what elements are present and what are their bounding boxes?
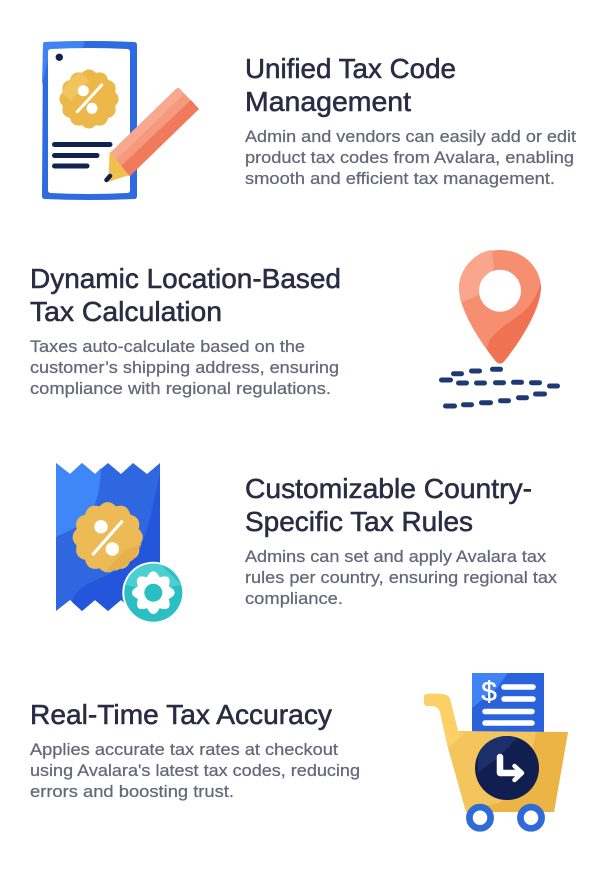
description: Admins can set and apply Avalara tax	[245, 547, 547, 566]
document hole	[56, 54, 63, 61]
description: compliance.	[245, 589, 343, 608]
text lines	[54, 144, 110, 166]
icon: shopping cart with invoice	[424, 673, 568, 828]
heading: Specific Tax Rules	[245, 506, 473, 537]
section 3 text	[245, 473, 558, 608]
description: smooth and efficient tax management.	[245, 169, 555, 188]
receipt	[56, 463, 160, 611]
document page	[48, 48, 130, 194]
icon: tax receipt with gear	[56, 463, 184, 624]
pin body	[459, 250, 541, 364]
heading: Real-Time Tax Accuracy	[30, 699, 332, 730]
invoice lines	[485, 687, 533, 723]
heading	[245, 473, 532, 537]
percent badge	[73, 503, 142, 572]
description	[245, 127, 576, 188]
invoice	[472, 673, 544, 735]
heading	[245, 53, 456, 117]
icon: tax document with pencil	[42, 41, 199, 200]
description: errors and boosting trust.	[30, 782, 234, 801]
description	[30, 337, 339, 398]
description	[30, 740, 360, 801]
description: compliance with regional regulations.	[30, 379, 331, 398]
section 1 text	[245, 53, 576, 188]
document frame	[42, 41, 137, 200]
heading: Unified Tax Code	[245, 53, 456, 84]
cart body and handle	[424, 694, 568, 812]
section 4 text	[30, 699, 360, 801]
heading: Dynamic Location-Based	[30, 263, 341, 294]
heading	[30, 263, 341, 327]
pin hole	[479, 270, 521, 312]
heading: Management	[245, 86, 411, 117]
heading: Tax Calculation	[30, 296, 222, 327]
section 2 text	[30, 263, 341, 398]
description: product tax codes from Avalara, enabling	[245, 148, 574, 167]
gear badge	[122, 562, 184, 624]
icon: location pin	[442, 250, 558, 406]
heading: Customizable Country-	[245, 473, 532, 504]
description: Applies accurate tax rates at checkout	[30, 740, 338, 759]
description: using Avalara's latest tax codes, reducing	[30, 761, 360, 780]
description: rules per country, ensuring regional tax	[245, 568, 558, 587]
dollar sign: $	[481, 676, 497, 707]
clock circle	[475, 736, 539, 800]
description: customer’s shipping address, ensuring	[30, 358, 339, 377]
description: Admin and vendors can easily add or edit	[245, 127, 576, 146]
description	[245, 547, 558, 608]
pencil	[106, 88, 199, 181]
wheels	[469, 807, 542, 828]
map dashes	[442, 369, 558, 406]
description: Taxes auto-calculate based on the	[30, 337, 305, 356]
percent badge	[60, 70, 118, 128]
